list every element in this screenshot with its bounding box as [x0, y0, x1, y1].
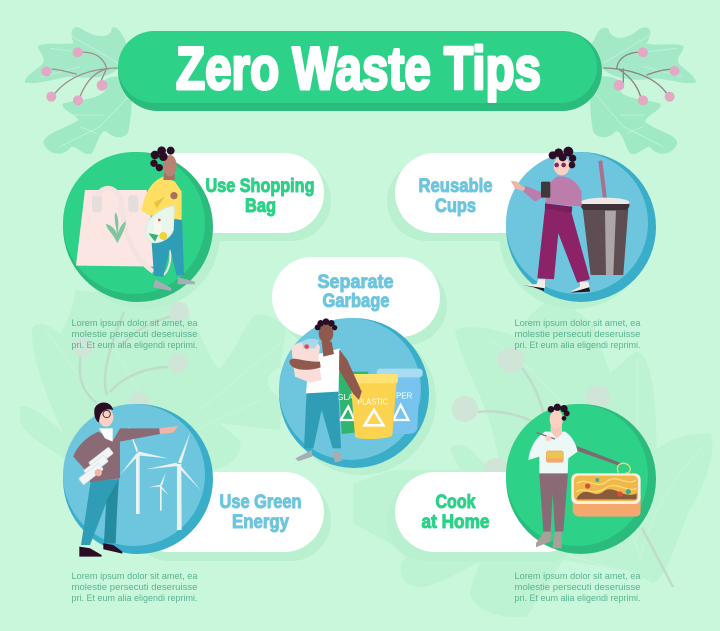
illustration: person with shopping bag: [76, 146, 195, 291]
body text: cups: Lorem ipsum dolor sit amet, ea: [514, 318, 640, 328]
decoration: top right leaves and berries: [590, 27, 696, 154]
title banner: [118, 31, 602, 111]
heading: separate garbage: Garbage: [322, 291, 390, 312]
panel: reusable cups: [387, 147, 656, 309]
illustration: person with reusable cup: [511, 147, 629, 293]
background leaves and branches: [20, 290, 712, 617]
panel: use shopping bag: [63, 146, 331, 309]
body text: energy: Lorem ipsum dolor sit amet, ea: [72, 571, 198, 581]
body text: shopping: Lorem ipsum dolor sit amet, ea: [72, 318, 198, 328]
heading: use shopping bag: Use Shopping: [206, 176, 314, 197]
heading: use green energy: Energy: [232, 512, 289, 533]
body text: shopping: molestie persecuti deseruisse: [72, 329, 198, 339]
heading: cook at home: at Home: [422, 512, 490, 533]
heading: use shopping bag: Bag: [245, 196, 276, 217]
illustration: wind turbines and person pointing: [73, 402, 201, 557]
body text: energy: molestie persecuti deseruisse: [72, 582, 198, 592]
heading: reusable cups: Reusable: [418, 176, 492, 197]
illustration: person sorting garbage into bins: GLA: [337, 393, 354, 402]
illustration: person sorting garbage into bins: PER: [396, 392, 413, 401]
heading: cook at home: Cook: [436, 492, 476, 513]
heading: separate garbage: Separate: [318, 272, 394, 293]
illustration: person sorting garbage into bins: PLASTIC: [357, 397, 388, 406]
panel: separate garbage: [272, 257, 447, 475]
heading: reusable cups: Cups: [435, 196, 476, 217]
body text: cups: pri. Et eum alia eligendi reprimi.: [514, 340, 640, 350]
panel: use green energy: [63, 402, 331, 561]
body text: cook: pri. Et eum alia eligendi reprimi.: [514, 593, 640, 603]
title: Zero Waste Tips: [176, 35, 541, 102]
body text: cook: Lorem ipsum dolor sit amet, ea: [514, 571, 640, 581]
body text: cups: molestie persecuti deseruisse: [514, 329, 640, 339]
body text: energy: pri. Et eum alia eligendi reprimi.: [72, 593, 198, 603]
body text: shopping: pri. Et eum alia eligendi reprimi.: [72, 340, 198, 350]
illustration: person eating noodles: [528, 404, 641, 548]
illustration: person sorting garbage into bins: [289, 318, 423, 463]
heading: use green energy: Use Green: [220, 492, 302, 513]
body text: cook: molestie persecuti deseruisse: [514, 582, 640, 592]
panel: cook at home: [387, 404, 656, 561]
decoration: top left leaves and berries: [25, 27, 132, 154]
